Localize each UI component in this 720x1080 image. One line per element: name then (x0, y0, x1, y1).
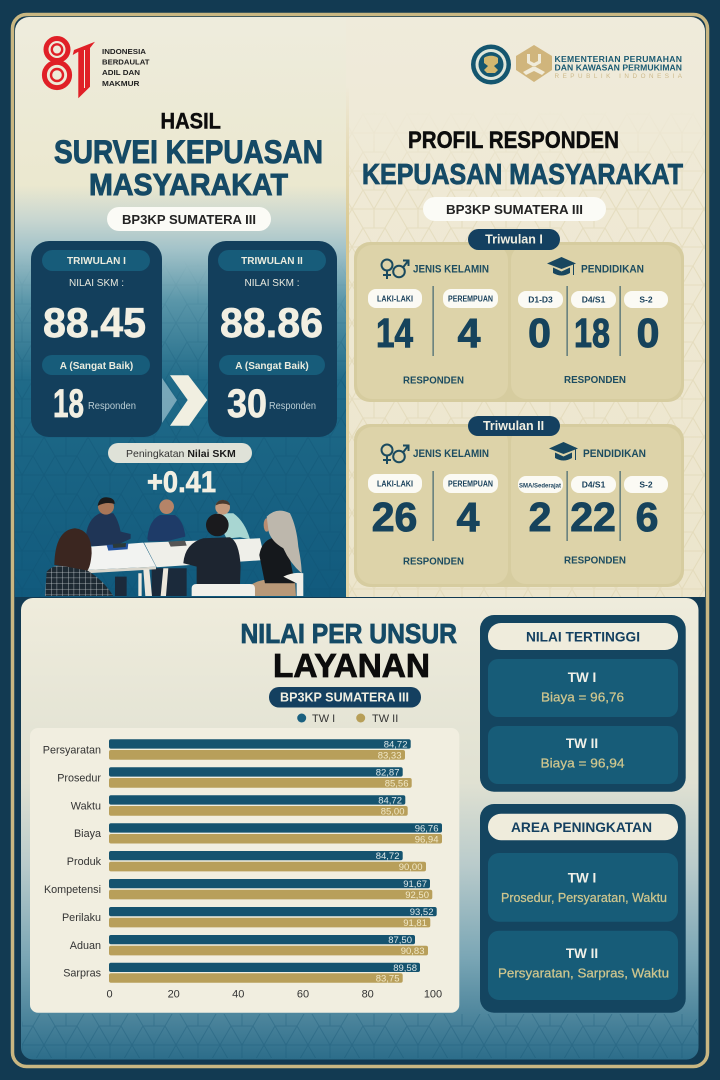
gender counts: 14 (376, 310, 413, 356)
bars: Persyaratan: 83,33 (378, 750, 402, 762)
caption: respondents: RESPONDEN (403, 556, 464, 568)
bars: Waktu: 84,72 (378, 796, 402, 806)
education counts: D4/S1 (582, 480, 606, 490)
bars: Sarpras: 89,58 (393, 963, 417, 974)
title: survey results (54, 108, 323, 202)
education counts: SMA/Sederajat (519, 482, 562, 490)
item: TW II highest: Biaya = 96,94 (540, 756, 624, 771)
legend (297, 713, 398, 725)
title: respondent profile: PROFIL RESPONDEN (408, 127, 619, 154)
x axis labels: 40 (232, 989, 244, 1001)
panel: survey results (15, 17, 349, 597)
header: highest score (488, 623, 678, 650)
item: TW II improvement: Persyaratan, Sarpras, Waktu (498, 966, 669, 981)
legend: TW II (372, 713, 398, 725)
bars: Biaya: 96,94 (415, 834, 438, 845)
bars: Kompetensi: 91,67 (403, 879, 427, 890)
pill: unit name (269, 687, 421, 708)
bars: Waktu (71, 795, 408, 818)
divider: left and right panels (346, 85, 349, 597)
title: score per service element: NILAI PER UNSUR (240, 618, 457, 649)
title: respondent profile (362, 127, 684, 191)
item: TW I highest: TW I (568, 670, 596, 685)
card: Triwulan II: Responden (269, 401, 316, 412)
pill: SKM increase label (108, 443, 252, 463)
bars: Biaya: Biaya (74, 828, 101, 840)
bars: Prosedur: 85,56 (385, 778, 408, 790)
x axis labels (106, 989, 442, 1001)
caption: respondents: RESPONDEN (403, 374, 464, 386)
bars: Waktu: 85,00 (381, 806, 404, 818)
title: survey results: MASYARAKAT (89, 167, 288, 202)
bars: Perilaku: Perilaku (62, 912, 101, 924)
item: TW II highest (488, 726, 678, 784)
subtitle pill: unit name (423, 197, 606, 221)
subtitle pill: unit name (107, 207, 271, 231)
gender counts: LAKI-LAKI (377, 294, 413, 304)
logo: 81 Indonesia: ADIL DAN (102, 68, 140, 77)
photo: meeting team around a table (45, 497, 303, 596)
bars: Sarpras: 83,75 (376, 974, 400, 985)
bars: Kompetensi: Kompetensi (44, 884, 101, 896)
gender counts: PEREMPUAN (448, 294, 493, 304)
education counts: D1-D3 (528, 294, 553, 304)
card: Triwulan I: TRIWULAN I (67, 256, 126, 267)
education counts: S-2 (639, 294, 653, 304)
item: TW I highest: Biaya = 96,76 (541, 690, 624, 705)
panel: highest score (480, 615, 686, 792)
card: Triwulan II: A (Sangat Baik) (235, 361, 309, 372)
bars: Perilaku: 93,52 (410, 907, 434, 918)
bars: Aduan (70, 935, 428, 957)
logo: 81 Indonesia (44, 38, 150, 98)
bars: Kompetensi (44, 879, 432, 901)
pill: unit name: BP3KP SUMATERA III (280, 690, 409, 704)
panel: respondents Triwulan I (354, 229, 684, 402)
icon: gender (382, 260, 408, 279)
item: TW I improvement: TW I (568, 871, 596, 886)
logo: 81 Indonesia: MAKMUR (102, 79, 140, 88)
header: improvement areas: AREA PENINGKATAN (511, 819, 652, 835)
legend: TW I (312, 713, 335, 725)
gender counts (368, 286, 498, 356)
item: TW I highest (488, 659, 678, 717)
education counts: S-2 (639, 480, 653, 490)
heading: education: PENDIDIKAN (583, 448, 646, 460)
x axis labels: 80 (362, 989, 374, 1001)
item: TW I improvement (488, 853, 678, 922)
subtitle pill: unit name: BP3KP SUMATERA III (446, 202, 583, 217)
bars: Perilaku: 91,81 (403, 918, 427, 929)
bars: Persyaratan: Persyaratan (43, 744, 101, 756)
card: Triwulan I (31, 241, 162, 437)
education counts: 22 (570, 494, 616, 540)
icon: graduation cap (549, 442, 578, 460)
education counts: 6 (636, 494, 658, 540)
card: Triwulan II: 88.86 (220, 299, 323, 346)
x axis labels: 0 (106, 989, 113, 1001)
logo: BP3KP seal (471, 44, 511, 84)
pill: SKM increase label: Peningkatan Nilai SKM (126, 448, 236, 460)
badge: Triwulan I (468, 229, 560, 250)
x axis labels: 100 (424, 989, 442, 1001)
panel: improvement areas (480, 804, 686, 1013)
heading: gender: JENIS KELAMIN (413, 448, 489, 460)
bars: Biaya: 96,76 (415, 824, 438, 834)
card: Triwulan II: TRIWULAN II (241, 256, 303, 267)
card: Triwulan II: 30 (227, 382, 267, 426)
bars: Prosedur: Prosedur (57, 772, 101, 784)
logo: ministry of housing: REPUBLIK INDONESIA (554, 73, 683, 80)
title: respondent profile: KEPUASAN MASYARAKAT (362, 159, 684, 191)
title: survey results: SURVEI KEPUASAN (54, 134, 323, 170)
card: Triwulan I: Responden (88, 401, 136, 412)
bars: Sarpras (63, 963, 420, 985)
gender counts: 26 (372, 494, 417, 540)
item: TW II improvement (488, 931, 678, 1000)
gender counts: PEREMPUAN (448, 478, 493, 488)
header: highest score: NILAI TERTINGGI (526, 629, 640, 645)
logo: 81 Indonesia: BERDAULAT (102, 58, 150, 66)
header: improvement areas (488, 814, 678, 840)
education counts: 0 (637, 310, 659, 356)
card: Triwulan I: 18 (53, 382, 84, 426)
bar chart (30, 728, 459, 1013)
education counts: 0 (528, 310, 551, 356)
bars: Produk (67, 851, 426, 873)
bars: Produk: 84,72 (376, 851, 400, 862)
education counts: 18 (574, 310, 610, 356)
bars: Prosedur (57, 767, 412, 790)
bars: Aduan: 90,83 (401, 946, 424, 957)
education counts: D4/S1 (582, 294, 606, 304)
logo: ministry of housing: DAN KAWASAN PERMUKIMAN (554, 62, 682, 72)
card: Triwulan I: A (Sangat Baik) (60, 361, 133, 372)
gender counts: 4 (458, 310, 481, 356)
icon: graduation cap (547, 257, 576, 276)
x axis labels: 20 (168, 989, 180, 1001)
heading: gender: JENIS KELAMIN (413, 264, 489, 276)
gender counts: 4 (457, 494, 480, 540)
badge: Triwulan II: Triwulan II (483, 419, 544, 433)
panel: score per service element (21, 598, 698, 1060)
bars: Sarpras: Sarpras (63, 967, 102, 979)
card: Triwulan I: 88.45 (43, 299, 146, 346)
bars: Waktu: Waktu (71, 800, 101, 812)
heading: education: PENDIDIKAN (581, 264, 644, 276)
bars: Aduan: Aduan (70, 940, 101, 952)
bars: Kompetensi: 92,50 (405, 890, 429, 901)
bars: Prosedur: 82,87 (376, 768, 400, 778)
education counts: 2 (529, 494, 551, 540)
badge: Triwulan II (468, 416, 560, 436)
panel: respondents Triwulan II (354, 416, 684, 587)
education counts (518, 471, 668, 541)
bars: Biaya (74, 823, 442, 845)
gender counts (368, 471, 498, 541)
item: TW II improvement: TW II (566, 946, 598, 961)
education counts (518, 286, 668, 356)
logo: ministry of housing (516, 45, 683, 82)
caption: respondents education: RESPONDEN (564, 374, 626, 386)
SKM increase value: +0.41 (147, 466, 216, 499)
bars: Perilaku (62, 907, 437, 929)
bars: Produk: Produk (67, 856, 102, 868)
title: score per service element (240, 618, 457, 684)
title: survey results: HASIL (160, 108, 221, 134)
logo: 81 Indonesia: INDONESIA (102, 47, 147, 56)
card: Triwulan II (208, 241, 337, 437)
panel: respondent profile (330, 17, 705, 597)
logo: ministry of housing: KEMENTERIAN PERUMAHAN (554, 54, 682, 64)
bars: Produk: 90,00 (399, 862, 422, 873)
caption: respondents education: RESPONDEN (564, 554, 626, 566)
item: TW I improvement: Prosedur, Persyaratan, Waktu (501, 890, 667, 905)
bars: Aduan: 87,50 (388, 935, 412, 946)
card: Triwulan II: NILAI SKM : (244, 278, 300, 289)
subtitle pill: unit name: BP3KP SUMATERA III (122, 212, 256, 227)
card: Triwulan I: NILAI SKM : (69, 278, 124, 289)
title: score per service element: LAYANAN (273, 647, 430, 684)
badge: Triwulan I: Triwulan I (485, 232, 543, 246)
item: TW II highest: TW II (566, 736, 598, 751)
bars: Persyaratan (43, 739, 411, 762)
icon: gender (382, 444, 408, 464)
gender counts: LAKI-LAKI (377, 478, 413, 488)
arrow: increase (162, 375, 207, 426)
bars: Persyaratan: 84,72 (384, 740, 408, 750)
x axis labels: 60 (297, 989, 309, 1001)
